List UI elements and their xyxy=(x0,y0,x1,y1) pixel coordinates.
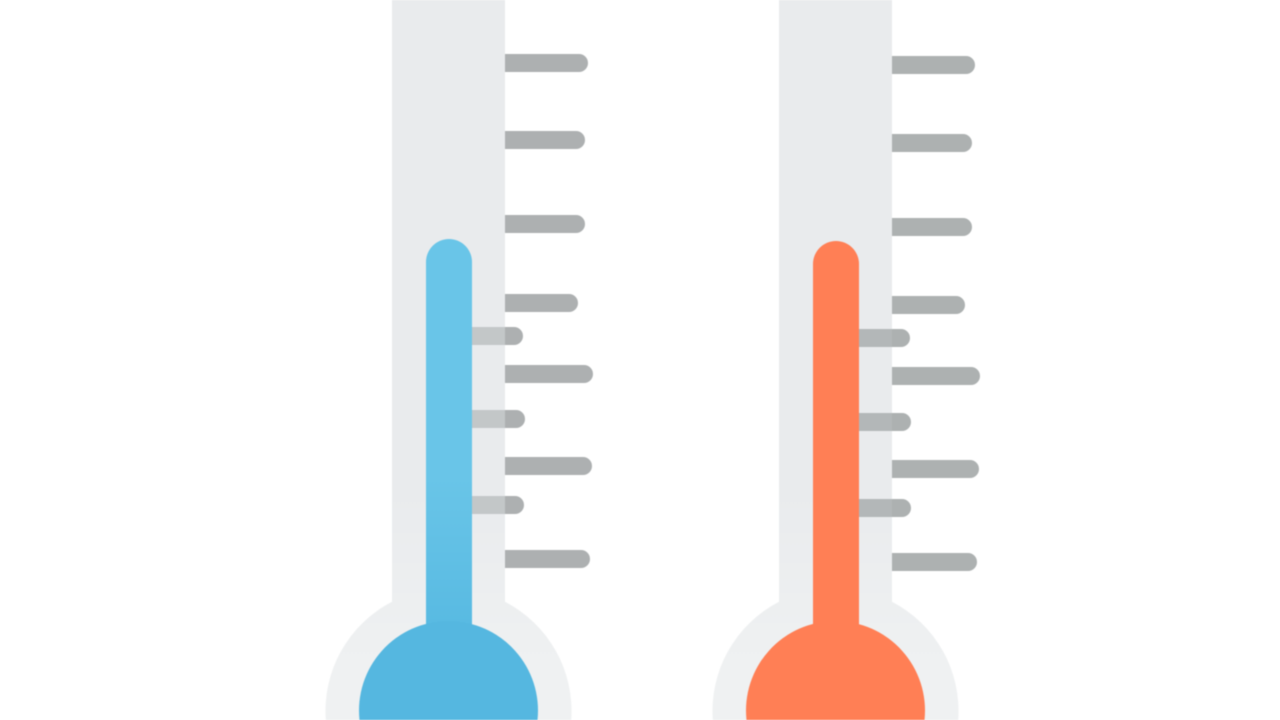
scale ticks: blue thermometer xyxy=(505,54,593,568)
glass body: blue thermometer xyxy=(325,0,572,720)
mercury column: orange xyxy=(813,241,859,640)
thermometer: orange (hot) xyxy=(712,0,980,720)
glass body: orange thermometer xyxy=(712,0,959,720)
minor ticks over glass: blue thermometer xyxy=(470,327,505,514)
mercury column: blue xyxy=(426,239,472,640)
mercury bulb: orange xyxy=(746,621,925,720)
thermometer: blue (cold) xyxy=(325,0,593,720)
mercury bulb: blue xyxy=(359,621,538,720)
minor ticks over glass: orange thermometer xyxy=(857,329,892,517)
scale ticks: orange thermometer xyxy=(892,56,980,571)
